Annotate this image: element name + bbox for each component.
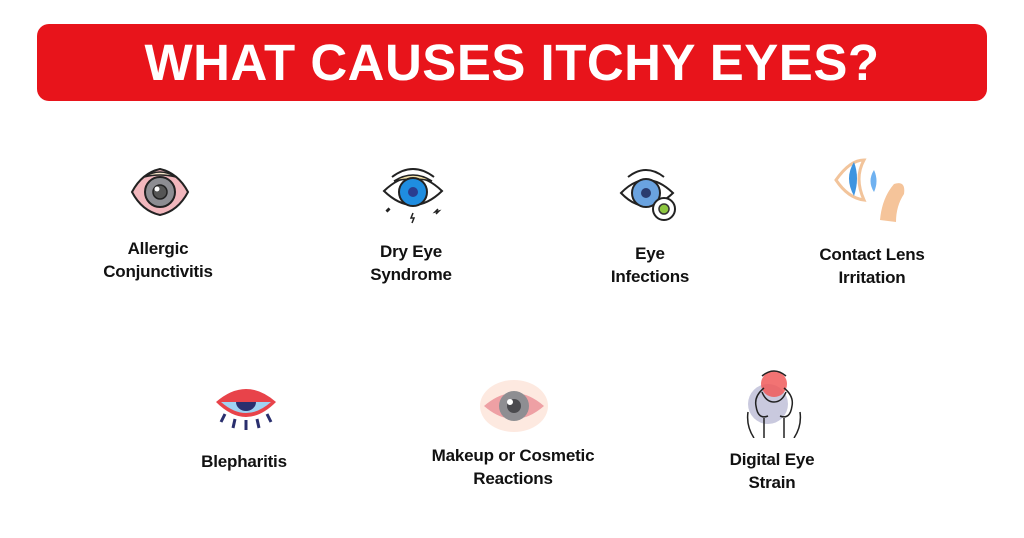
label: dry eye syndrome — [370, 242, 452, 284]
label: dry eye syndrome: Syndrome — [370, 265, 452, 284]
icon: red eye (makeup) — [480, 380, 548, 432]
label: makeup or cosmetic reactions: Reactions — [473, 469, 553, 488]
icon: blepharitis — [216, 389, 276, 430]
icon: contact lens — [834, 158, 904, 222]
icon: allergic eye — [130, 168, 190, 216]
label: allergic conjunctivitis — [103, 239, 213, 281]
title banner — [37, 24, 987, 101]
label: contact lens irritation — [819, 245, 925, 287]
label: allergic conjunctivitis: Conjunctivitis — [103, 262, 213, 281]
label: eye infections — [611, 244, 689, 286]
icon: digital eye strain person — [746, 370, 802, 438]
label: eye infections: Eye — [635, 244, 665, 263]
title banner: WHAT CAUSES ITCHY EYES? — [144, 34, 880, 91]
label: digital eye strain — [730, 450, 814, 492]
icon: eye infection — [620, 169, 676, 221]
label: contact lens irritation: Contact Lens — [819, 245, 925, 264]
label: blepharitis: Blepharitis — [201, 452, 287, 471]
label: digital eye strain: Strain — [748, 473, 795, 492]
label: makeup or cosmetic reactions — [432, 446, 594, 488]
label: makeup or cosmetic reactions: Makeup or Cosmetic — [432, 446, 594, 465]
label: dry eye syndrome: Dry Eye — [380, 242, 442, 261]
icon: dry eye — [382, 168, 444, 224]
label: contact lens irritation: Irritation — [839, 268, 905, 287]
label: allergic conjunctivitis: Allergic — [128, 239, 188, 258]
label: eye infections: Infections — [611, 267, 689, 286]
label: digital eye strain: Digital Eye — [730, 450, 814, 469]
